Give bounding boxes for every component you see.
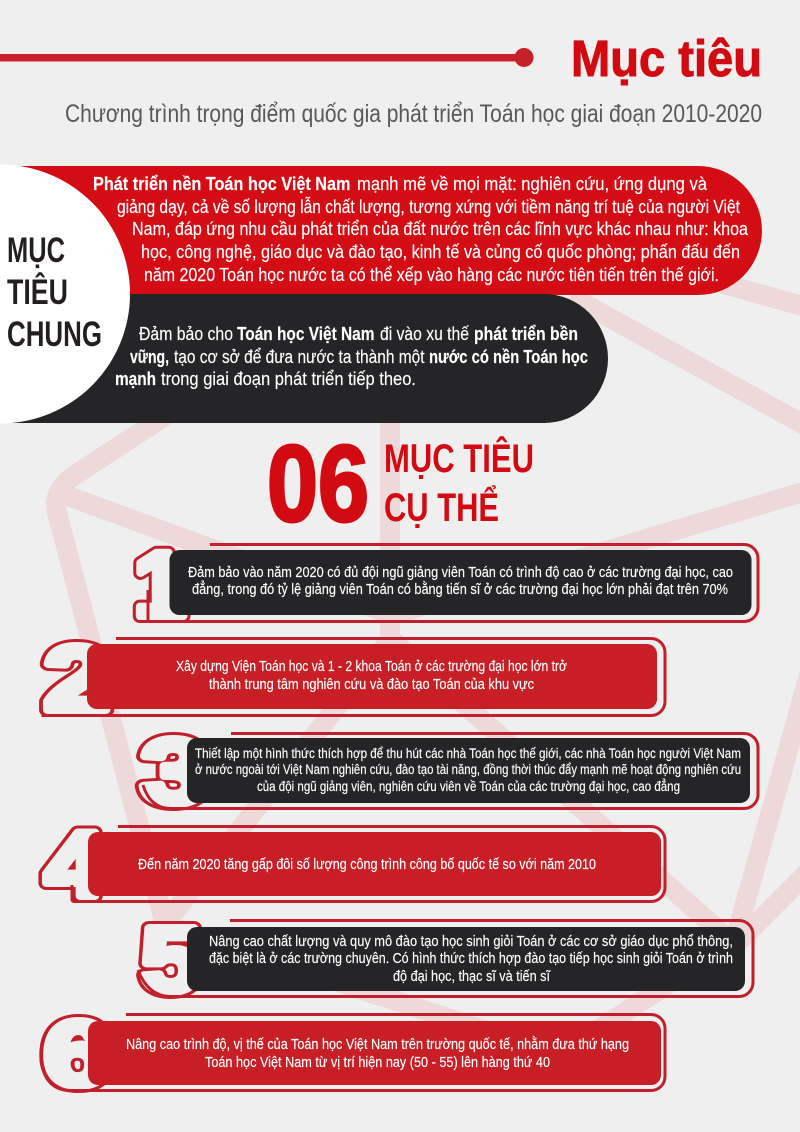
panel: general objective 2 (dark): [0, 294, 608, 423]
white half circle with heading: MỤC: [7, 231, 65, 270]
card 2: thành trung tâm nghiên cứu và đào tạo Toán của khu vực: [209, 677, 534, 693]
card 6: Nâng cao trình độ, vị thế của Toán học Việt Nam trên trường quốc tế, nhằm đưa thứ hạng: [126, 1036, 629, 1053]
panel: general objective 1 (red): năm 2020 Toán học nước ta có thể xếp vào hàng các nước tiên tiến trên thế giới.: [144, 265, 719, 285]
card 6: [41, 1003, 665, 1105]
card 6: Toán học Việt Nam từ vị trí hiện nay (50 - 55) lên hàng thứ 40: [205, 1055, 550, 1071]
panel: general objective 1 (red): [0, 166, 762, 295]
panel: general objective 1 (red): Nam, đáp ứng nhu cầu phát triển của đất nước trên các lĩnh vực khác nhau như: khoa: [132, 219, 749, 239]
card 5: đặc biệt là ở các trường chuyên. Có hình thức thích hợp đào tạo tiếp học sinh giỏi Toán ở trình: [209, 951, 733, 967]
card 1: Đảm bảo vào năm 2020 có đủ đội ngũ giảng viên Toán có trình độ cao ở các trường đại học, cao: [188, 565, 733, 581]
card 1: đẳng, trong đó tỷ lệ giảng viên Toán có bằng tiến sĩ ở các trường đại học lớn phải đạt trên 70%: [192, 580, 728, 598]
card 5: Nâng cao chất lượng và quy mô đào tạo học sinh giỏi Toán ở các cơ sở giáo dục phổ thông,: [209, 934, 733, 950]
card 3: [141, 721, 758, 823]
card 5: [138, 909, 753, 1011]
card 4: Đến năm 2020 tăng gấp đôi số lượng công trình công bố quốc tế so với năm 2010: [138, 857, 596, 873]
card 6: 6: [44, 1003, 110, 1105]
card 5: 5: [141, 909, 201, 1011]
section heading: 06 specific objectives: 06: [267, 423, 369, 545]
panel: general objective 2 (dark): trong giai đoạn phát triển tiếp theo.: [161, 369, 416, 389]
card 1: 1: [134, 534, 186, 636]
card 1: [134, 534, 758, 636]
card 2: Xây dựng Viện Toán học và 1 - 2 khoa Toán ở các trường đại học lớn trở: [176, 659, 567, 675]
card 1: 1: [134, 534, 186, 636]
card 3: 3: [141, 721, 207, 823]
title: Mục tiêu: [571, 30, 762, 87]
panel: general objective 2 (dark): mạnh: [115, 369, 156, 389]
panel: general objective 2 (dark): tạo cơ sở để đưa nước ta thành một: [174, 347, 424, 367]
card 4: 4: [45, 814, 105, 916]
panel: general objective 2 (dark): phát triển bền: [474, 324, 578, 344]
white half circle with heading: [0, 164, 130, 424]
white half circle with heading: TIÊU: [7, 272, 68, 312]
panel: general objective 2 (dark): nước có nền Toán học: [429, 347, 588, 367]
panel: general objective 2 (dark): vững,: [130, 347, 169, 367]
card 3: của đội ngũ giảng viên, nghiên cứu viên về Toán của các trường đại học, cao đẳng: [257, 779, 680, 794]
header rule with end dot: [0, 48, 534, 67]
card 2: 2: [44, 628, 110, 730]
card 5: độ đại học, thạc sĩ và tiến sĩ: [393, 969, 551, 985]
white half circle with heading: CHUNG: [7, 315, 102, 354]
panel: general objective 2 (dark): Toán học Việt Nam: [237, 324, 374, 344]
card 2: [42, 628, 665, 730]
card 4: [45, 814, 665, 916]
card 3: 3: [141, 721, 207, 823]
panel: general objective 1 (red): Phát triển nền Toán học Việt Nam: [93, 174, 350, 194]
section heading: 06 specific objectives: MỤC TIÊU: [384, 435, 534, 481]
card 5: 5: [141, 909, 201, 1011]
section heading: 06 specific objectives: CỤ THỂ: [384, 483, 499, 530]
card 2: 2: [44, 628, 110, 730]
section heading: 06 specific objectives: [267, 423, 534, 545]
card 6: 6: [44, 1003, 110, 1105]
card 4: 4: [45, 814, 105, 916]
panel: general objective 1 (red): mạnh mẽ về mọi mặt: nghiên cứu, ứng dụng và: [357, 174, 708, 194]
panel: general objective 2 (dark): Đảm bảo cho: [139, 324, 233, 344]
panel: general objective 2 (dark): đi vào xu thế: [380, 324, 469, 344]
panel: general objective 1 (red): học, công nghệ, giáo dục và đào tạo, kinh tế và củng cố quốc phòng; phấn đấu đến: [141, 242, 740, 262]
